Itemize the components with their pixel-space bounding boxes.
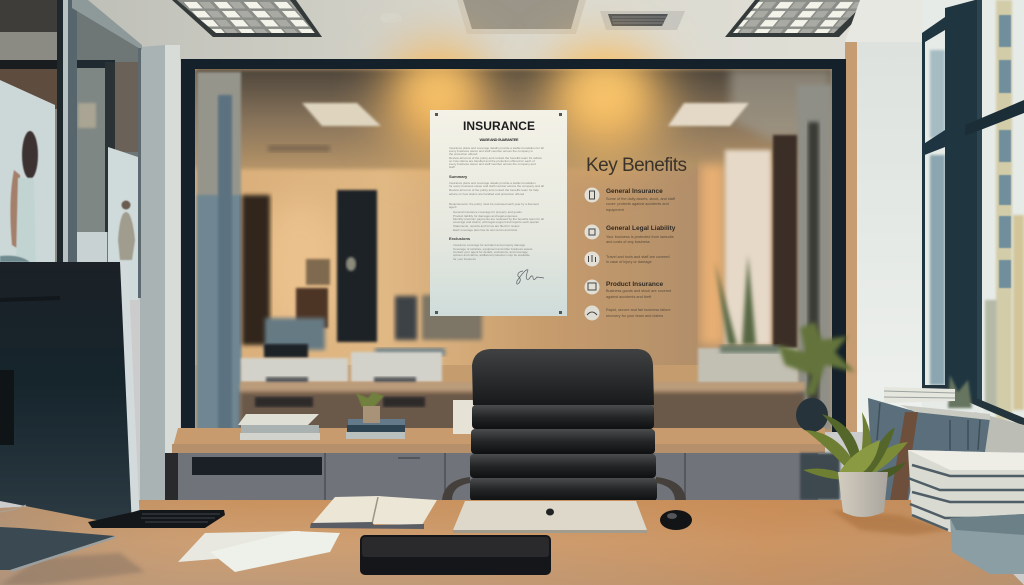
poster section headings: Summary — [449, 174, 468, 179]
poster body text: coverage and claims, with legal support and reports each quarter — [453, 220, 539, 224]
ceiling light left — [172, 0, 322, 37]
left column — [140, 45, 180, 510]
metal tray — [950, 514, 1024, 574]
poster body text: Coverage of vehicles, equipment and other business assets — [453, 247, 533, 251]
front books — [908, 450, 1024, 535]
poster title: INSURANCE — [463, 119, 535, 133]
poster photo woman — [0, 131, 38, 262]
benefit 4 — [584, 280, 671, 299]
benefit 5: Rapid, secure and fair business failure — [606, 308, 671, 312]
poster body text: Insurance coverage for accident and property damage — [453, 243, 525, 247]
benefit 3 — [584, 252, 670, 266]
glass room interior — [195, 45, 832, 432]
poster body text: Insurance plans and coverage details provide a stable foundation for all — [449, 146, 544, 150]
poster body text: Contact your agent for details, exclusions, and coverage — [453, 250, 528, 254]
office chair — [442, 349, 686, 501]
poster body text: Product liability for damages and legal expenses — [453, 214, 518, 218]
poster body text: on how claims are handled and the protection offered for each of — [449, 159, 535, 163]
computer mouse — [660, 510, 692, 530]
back desk — [165, 428, 840, 501]
poster body text: General insurance coverage for property and goods — [453, 210, 522, 214]
poster photo man — [118, 200, 135, 260]
smoke detector — [380, 13, 402, 23]
poster body text: options and claims; additional protection may be available — [453, 253, 530, 257]
window right — [922, 0, 1024, 430]
right wall — [845, 0, 1024, 432]
poster body text: advice on how claims are handled and protection offered — [449, 192, 524, 196]
benefit 3: in case of injury or damage — [606, 260, 652, 264]
benefit 5 — [584, 306, 671, 320]
back books right — [868, 387, 990, 518]
poster body text: Insurance plans and coverage details provide a stable foundation — [449, 181, 536, 185]
air vent — [600, 11, 685, 30]
poster body text: agent — [449, 205, 457, 209]
left glass partition — [0, 0, 142, 300]
poster body text: Review all terms of the policy and contact the benefits team for advice — [449, 156, 542, 160]
insurance poster — [430, 110, 567, 316]
poster section headings — [449, 174, 471, 241]
poster body text: Statements, records and forms are filed for review — [453, 224, 520, 228]
poster body text: every business owner and staff member across the company in — [449, 149, 533, 153]
benefit 1: equipment — [606, 208, 625, 212]
benefits list — [584, 188, 676, 320]
back desk items — [238, 392, 474, 440]
open notebook — [310, 496, 437, 529]
benefit 1: General Insurance — [606, 188, 663, 195]
benefit 2: Your business is protected from lawsuits — [606, 235, 674, 239]
ceiling light right — [725, 0, 875, 37]
benefit 4: against accidents and theft — [606, 295, 652, 299]
poster section headings: Exclusions — [449, 236, 471, 241]
paper sheets — [178, 531, 340, 572]
poster body text: for every business owner and staff member across the company and all — [449, 184, 544, 188]
poster body text: staff — [449, 165, 455, 169]
poster body text: for your business — [453, 257, 476, 261]
poster body text: Review all terms of the policy and contact the benefits team for help — [449, 188, 539, 192]
poster body text: Monthly premium payments are reviewed by the benefits team for all — [453, 217, 544, 221]
laptop — [453, 501, 647, 533]
benefit 1 — [584, 188, 676, 212]
benefit 2 — [584, 224, 676, 244]
benefit 4: Business goods and stock are covered — [606, 289, 671, 293]
tablet left — [0, 527, 116, 572]
tablet — [360, 535, 551, 575]
poster body text: the protection offered — [449, 152, 478, 156]
poster body text — [449, 146, 544, 261]
poster subtitle: WAGE AND GUARANTEE — [480, 138, 519, 142]
plant pot — [803, 412, 908, 517]
poster screws — [435, 113, 562, 314]
signature — [517, 270, 544, 284]
ceiling — [0, 0, 1024, 62]
poster body text: Requirements: the policy must be reviewed each year by a licensed — [449, 202, 539, 206]
benefit 1: Some of the daily assets, stock, and staff — [606, 197, 676, 201]
benefit 4: Product Insurance — [606, 281, 663, 288]
window frame — [181, 59, 846, 432]
keyboard — [88, 510, 225, 528]
front desk — [0, 500, 1024, 585]
benefit 2: General Legal Liability — [606, 225, 676, 232]
monitor — [0, 262, 140, 527]
benefit 2: and costs of any business — [606, 240, 650, 244]
ceiling vent — [457, 0, 586, 34]
benefit 1: cover: protects against accidents and — [606, 202, 669, 206]
key benefits heading: Key Benefits — [586, 155, 687, 176]
right background plant — [778, 322, 855, 432]
benefit 5: recovery for your team and claims — [606, 314, 663, 318]
poster body text: every business owner and staff member across the company and — [449, 162, 536, 166]
benefit 3: Travel and tools and staff are covered — [606, 255, 670, 259]
window sill and plant — [948, 375, 1024, 452]
poster body text: Each coverage plan has its own terms and limits — [453, 228, 518, 232]
